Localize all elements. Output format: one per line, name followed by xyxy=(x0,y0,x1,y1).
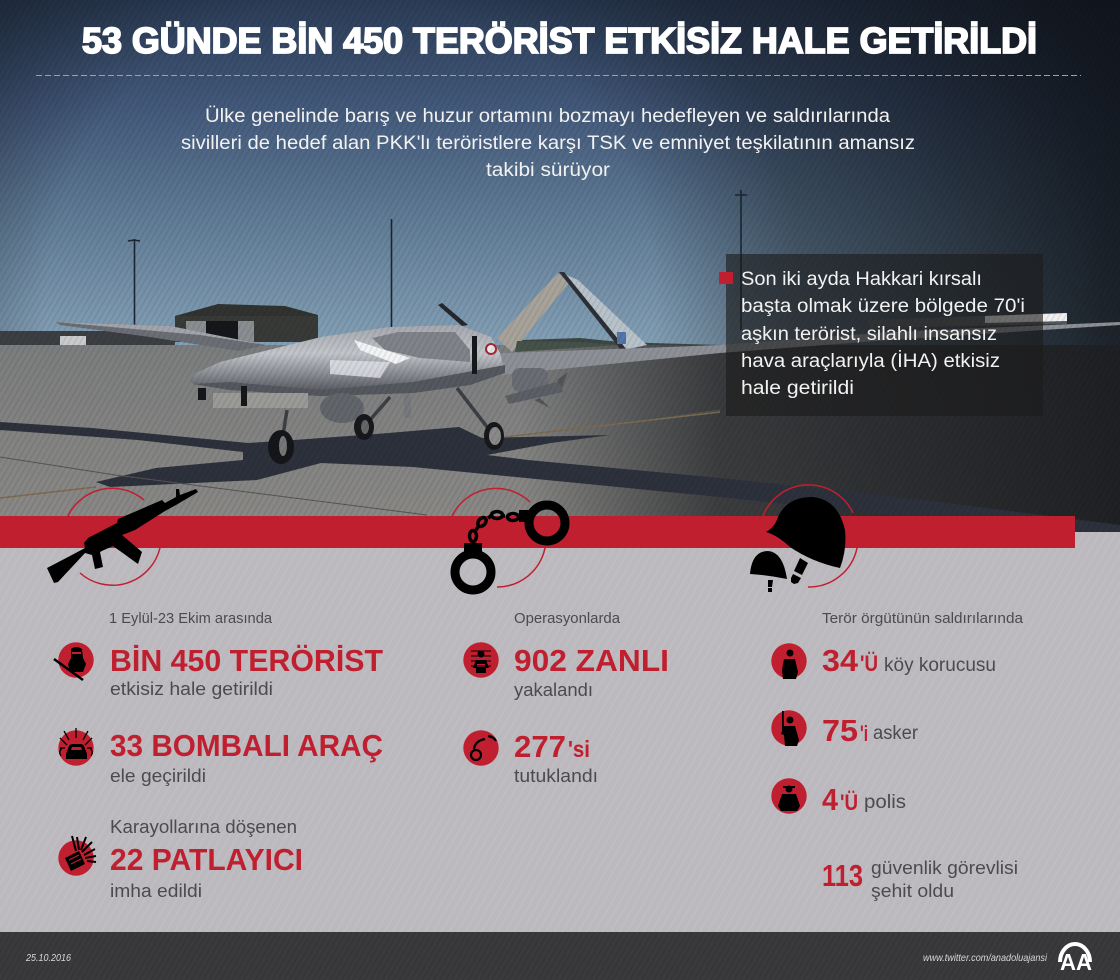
date: 25.10.2016 xyxy=(25,953,71,964)
stat: 75 soldiers: asker xyxy=(873,723,919,744)
stat: 34 village guards: 34 xyxy=(822,643,859,678)
stat: 1450 terrorists: BİN 450 TERÖRİST xyxy=(110,643,383,678)
intro text: Ülke genelinde barış ve huzur ortamını bozmayı hedefleyen ve saldırılarında xyxy=(205,106,890,127)
callout text: hale getirildi xyxy=(741,378,854,399)
column 2: operations xyxy=(463,611,669,786)
icon: village guard xyxy=(771,643,807,679)
twitter address: www.twitter.com/anadoluajansi xyxy=(923,952,1048,964)
shadow of the drone xyxy=(0,422,1120,536)
stat: 113 security personnel: 113 xyxy=(822,858,863,893)
icon: lamp poles xyxy=(128,190,747,330)
stat: 34 village guards: köy korucusu xyxy=(884,655,996,676)
label: ele geçirildi xyxy=(110,766,206,786)
callout text: Son iki ayda Hakkari kırsalı xyxy=(741,269,982,290)
label: yakalandı xyxy=(514,680,593,700)
column 3: martyrs xyxy=(771,611,1024,901)
drone propeller xyxy=(438,303,468,326)
stat: 33 car bombs: 33 BOMBALI ARAÇ xyxy=(110,728,383,763)
column 1: neutralised xyxy=(54,611,383,901)
icon: handcuffs with circle xyxy=(452,488,565,590)
icon: helmets with circle xyxy=(750,485,857,592)
label: etkisiz hale getirildi xyxy=(110,679,273,699)
stat: 113 security personnel: güvenlik görevlisi xyxy=(871,858,1018,878)
icon: police officer xyxy=(771,778,807,814)
apron markings xyxy=(0,410,720,515)
callout text: aşkın terörist, silahlı insansız xyxy=(741,324,997,345)
stat: 22 explosives: 22 PATLAYICI xyxy=(110,842,303,877)
callout: Hakkari xyxy=(719,254,1043,416)
heading: attacks: Terör örgütünün saldırılarında xyxy=(822,611,1024,627)
stat: 4 police: 4 xyxy=(822,782,839,817)
label: imha edildi xyxy=(110,881,202,901)
icon: armed militant xyxy=(54,642,94,680)
stat: 4 police xyxy=(822,782,906,817)
drone wings xyxy=(56,313,1120,376)
red square bullet xyxy=(719,272,733,284)
label: tutuklandı xyxy=(514,766,598,786)
stat: 75 soldiers: 'i xyxy=(860,721,868,746)
heading: date range: 1 Eylül-23 Ekim arasında xyxy=(109,611,273,627)
callout text: başta olmak üzere bölgede 70'i xyxy=(741,296,1025,317)
stat: 277 arrested: 277 xyxy=(514,729,566,764)
intro text xyxy=(181,106,915,181)
icon: explosive xyxy=(58,836,96,876)
icon: soldier xyxy=(771,710,807,746)
stat: 4 police: polis xyxy=(864,792,906,813)
footer xyxy=(0,932,1120,980)
title: 53 GÜNDE BİN 450 TERÖRİST ETKİSİZ HALE GETİRİLDİ xyxy=(82,20,1037,61)
stat: 34 village guards xyxy=(822,643,996,678)
callout text xyxy=(741,269,1025,399)
icon: rifle with circle xyxy=(47,488,198,585)
logo: Anadolu Agency: AA xyxy=(1060,949,1092,975)
icon: car bomb xyxy=(58,728,94,766)
callout text: hava araçlarıyla (İHA) etkisiz xyxy=(741,351,1000,372)
red band xyxy=(0,516,1075,548)
photo: drone on the apron xyxy=(0,0,1120,536)
stat: 75 soldiers: 75 xyxy=(822,713,858,748)
stat: 75 soldiers xyxy=(822,713,919,748)
stat: 902 suspects: 902 ZANLI xyxy=(514,643,669,678)
dashed divider xyxy=(36,74,1081,76)
drone tail xyxy=(497,272,647,352)
heading: operations: Operasyonlarda xyxy=(514,611,621,627)
icon: small handcuffs xyxy=(463,730,499,766)
label: roads: Karayollarına döşenen xyxy=(110,817,297,837)
stat: 113 security personnel: şehit oldu xyxy=(871,881,954,901)
stat: 4 police: 'Ü xyxy=(840,790,858,815)
stat: 277 arrested xyxy=(514,729,590,764)
distant buildings xyxy=(0,304,720,345)
panel: grey lower background xyxy=(0,532,1120,932)
intro text: sivilleri de hedef alan PKK'lı teröristlere karşı TSK ve emniyet teşkilatının amansız xyxy=(181,133,915,154)
stat: 113 security personnel xyxy=(822,858,1018,901)
stat: 277 arrested: 'si xyxy=(568,736,590,762)
icon: mugshot xyxy=(463,642,499,678)
drone underside: pod, gimbal, missile xyxy=(198,368,568,423)
intro text: takibi sürüyor xyxy=(486,160,611,181)
drone fuselage xyxy=(190,325,505,396)
drone landing gear xyxy=(268,388,504,464)
stat: 34 village guards: 'Ü xyxy=(860,651,878,676)
